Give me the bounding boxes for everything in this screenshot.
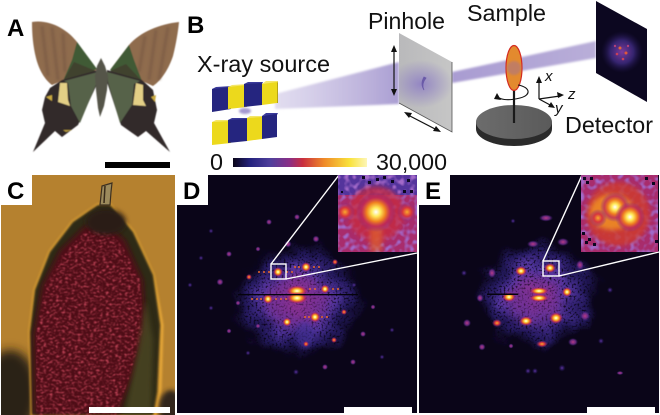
colour scale [210, 149, 447, 175]
pinhole plate [398, 33, 452, 133]
zoom box and leader lines [543, 175, 659, 276]
colour scale: 0 [210, 149, 223, 175]
undulator magnets [212, 81, 278, 145]
label C: C [7, 178, 24, 205]
panel: B experiment schematic [197, 0, 653, 175]
inset E [581, 175, 658, 252]
butterfly body [95, 58, 108, 117]
scale body [30, 205, 160, 415]
label A: A [7, 15, 24, 42]
label E: E [425, 178, 441, 205]
scale bar D [344, 407, 412, 413]
right forewing [110, 22, 179, 86]
right hindwing [107, 70, 170, 152]
left hindwing [33, 70, 98, 152]
beamstop streak [487, 294, 518, 295]
label D [176, 175, 208, 205]
panel: D diffraction pattern [177, 175, 417, 413]
label E [419, 175, 450, 205]
scale bar C [89, 407, 170, 413]
scale bar A [105, 162, 170, 168]
diffuse halo [232, 242, 364, 358]
olive band at right edge [125, 300, 153, 415]
left forewing [32, 22, 97, 85]
arrow: pinhole horizontal motion [404, 112, 441, 132]
x-ray source label: X-ray source [197, 51, 330, 77]
dark shadow at bottom left [0, 350, 38, 415]
zoom box and leader lines [271, 175, 417, 279]
sample stage [476, 88, 552, 146]
label B: B [187, 12, 204, 39]
panel: E diffraction pattern [419, 175, 659, 413]
sample label: Sample [467, 0, 546, 26]
panel: A butterfly photograph [32, 22, 179, 168]
x-ray beam after pinhole [452, 41, 596, 83]
detector label: Detector [565, 112, 653, 138]
detector [596, 1, 647, 102]
axes: x [544, 68, 553, 85]
inset D [335, 175, 417, 252]
pinhole label: Pinhole [368, 8, 445, 34]
scale bar E [587, 407, 655, 413]
arrow: pinhole vertical motion [391, 45, 397, 96]
red scale interior [33, 222, 146, 415]
speckle texture [36, 228, 143, 415]
axes [536, 68, 576, 117]
x-ray beam before pinhole [275, 62, 399, 109]
colour scale: 30,000 [376, 149, 447, 175]
panel: C optical micrograph [0, 175, 183, 415]
beamstop streak [238, 294, 358, 295]
streak dots [251, 266, 339, 318]
spine at scale tip [100, 183, 112, 205]
dark corner [159, 390, 183, 415]
label C [0, 175, 32, 205]
sample [506, 46, 522, 90]
diffraction spots [188, 214, 394, 375]
label D: D [183, 178, 200, 205]
bright halo around scale [30, 205, 162, 415]
diffuse halo [476, 240, 600, 348]
axes: y [554, 100, 564, 117]
dark tip region [86, 209, 126, 235]
arrow: sample rotation [494, 85, 528, 100]
axes: z [567, 86, 576, 103]
icon: butterfly [32, 22, 179, 152]
diffraction spots [461, 214, 624, 375]
